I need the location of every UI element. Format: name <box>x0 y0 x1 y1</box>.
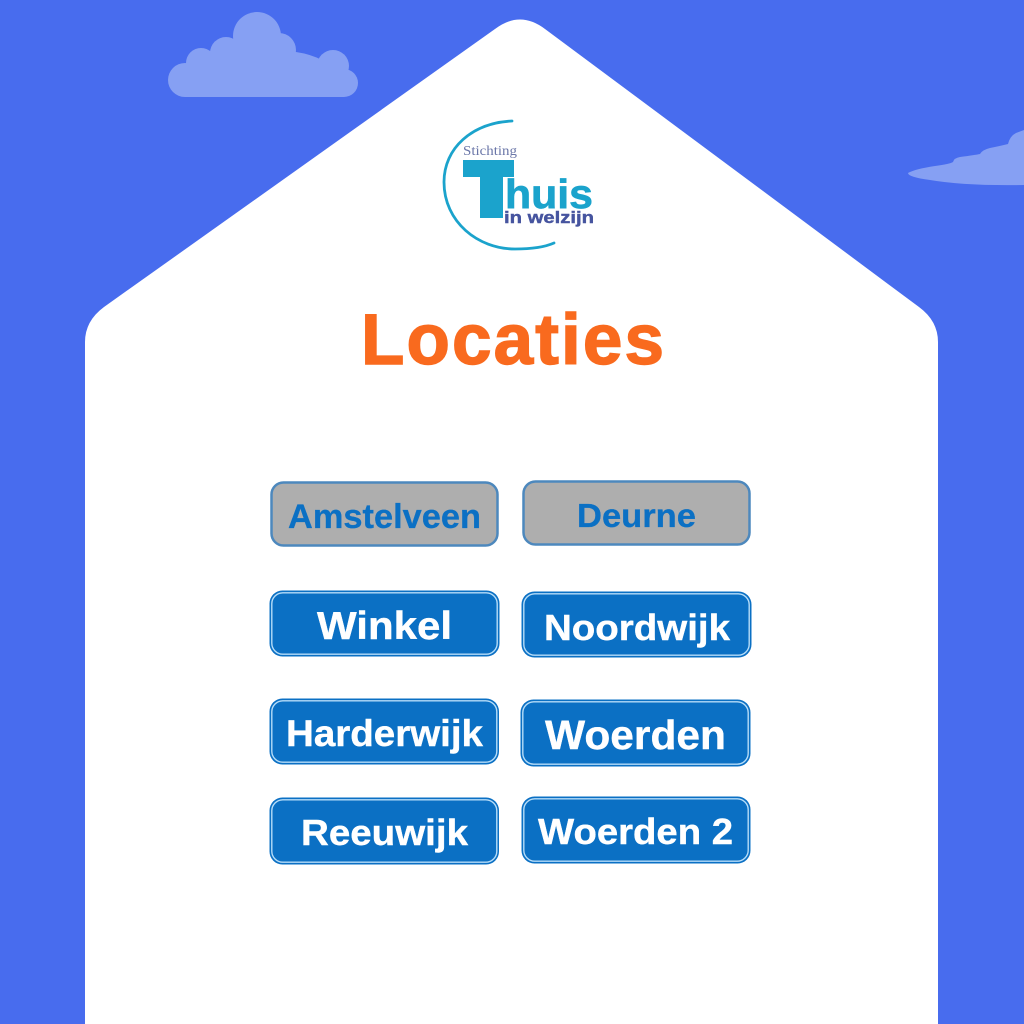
logo: Stichting Thuis in welzijn <box>444 121 594 249</box>
cloud: top left <box>168 12 358 97</box>
button: Woerden <box>520 700 750 766</box>
cloud: right edge <box>908 130 1024 185</box>
button: Winkel: Winkel <box>317 605 452 648</box>
button: Harderwijk: Harderwijk <box>286 713 483 754</box>
button: Deurne: Deurne <box>577 497 696 534</box>
title: Locaties <box>361 301 664 380</box>
button: Woerden 2: Woerden 2 <box>538 811 733 852</box>
button: Noordwijk <box>522 592 752 658</box>
logo: Stichting Thuis in welzijn: in welzijn <box>504 208 594 227</box>
button: Winkel <box>270 590 500 656</box>
button: Harderwijk <box>270 698 499 764</box>
button: Woerden 2 <box>522 796 750 864</box>
button: Deurne <box>524 482 750 544</box>
logo: Stichting Thuis in welzijn: Stichting <box>463 144 517 159</box>
button: Reeuwijk: Reeuwijk <box>301 812 469 853</box>
button: Amstelveen: Amstelveen <box>288 498 481 536</box>
button: Reeuwijk <box>270 798 499 864</box>
button: Amstelveen <box>272 482 498 546</box>
button: Woerden: Woerden <box>545 712 726 758</box>
button: Noordwijk: Noordwijk <box>544 607 731 648</box>
logo: Stichting Thuis in welzijn: huis <box>505 171 593 217</box>
